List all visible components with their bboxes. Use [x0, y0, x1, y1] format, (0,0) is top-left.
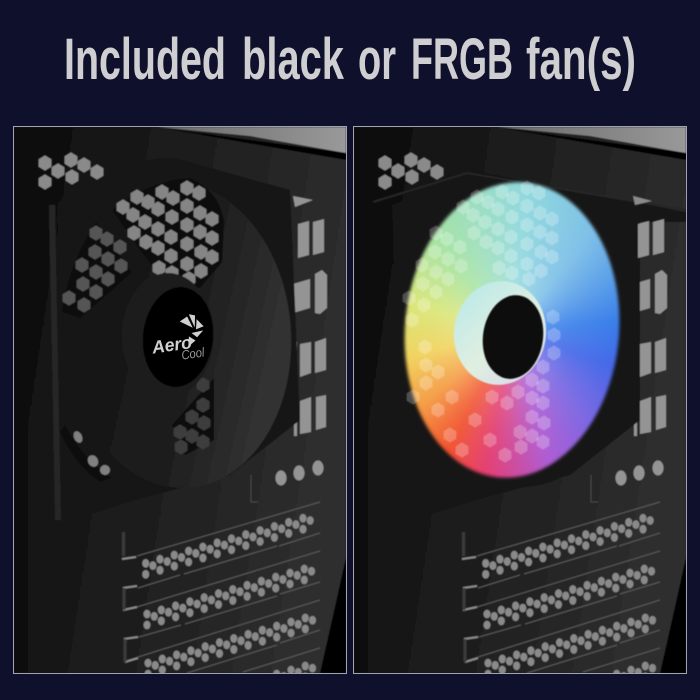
- fan opening: lower-left crescent: [60, 425, 112, 482]
- hex holes seen through fan: [117, 180, 218, 287]
- title: black: [242, 27, 345, 92]
- title: Included: [64, 27, 226, 92]
- logo: AeroCool: Cool: [180, 344, 206, 363]
- fan frame: [392, 188, 686, 492]
- fan frame: [57, 169, 300, 492]
- fan opening: upper sector: [112, 178, 224, 288]
- title: FRGB: [411, 27, 513, 92]
- fan ring: [66, 190, 292, 488]
- fan opening: left sector: [62, 222, 132, 318]
- fan hub: black centre: [482, 294, 544, 380]
- fan opening: lower sector: [172, 378, 214, 455]
- panel border: left: [14, 126, 346, 674]
- title: or: [358, 27, 396, 92]
- title: [64, 27, 636, 92]
- hex holes seen through glow: [403, 180, 560, 463]
- rainbow fan glow: [402, 180, 622, 480]
- fan hub: lit ring: [453, 281, 547, 386]
- fan hub: [142, 272, 213, 387]
- title: fan(s): [526, 27, 636, 92]
- panel: FRGB fan: [354, 127, 686, 700]
- panel: black fan: [14, 127, 346, 700]
- panel border: right: [354, 126, 686, 674]
- rainbow soft highlight: [416, 239, 591, 461]
- logo: AeroCool: Aero: [150, 332, 193, 358]
- logo: AeroCool: [152, 314, 204, 360]
